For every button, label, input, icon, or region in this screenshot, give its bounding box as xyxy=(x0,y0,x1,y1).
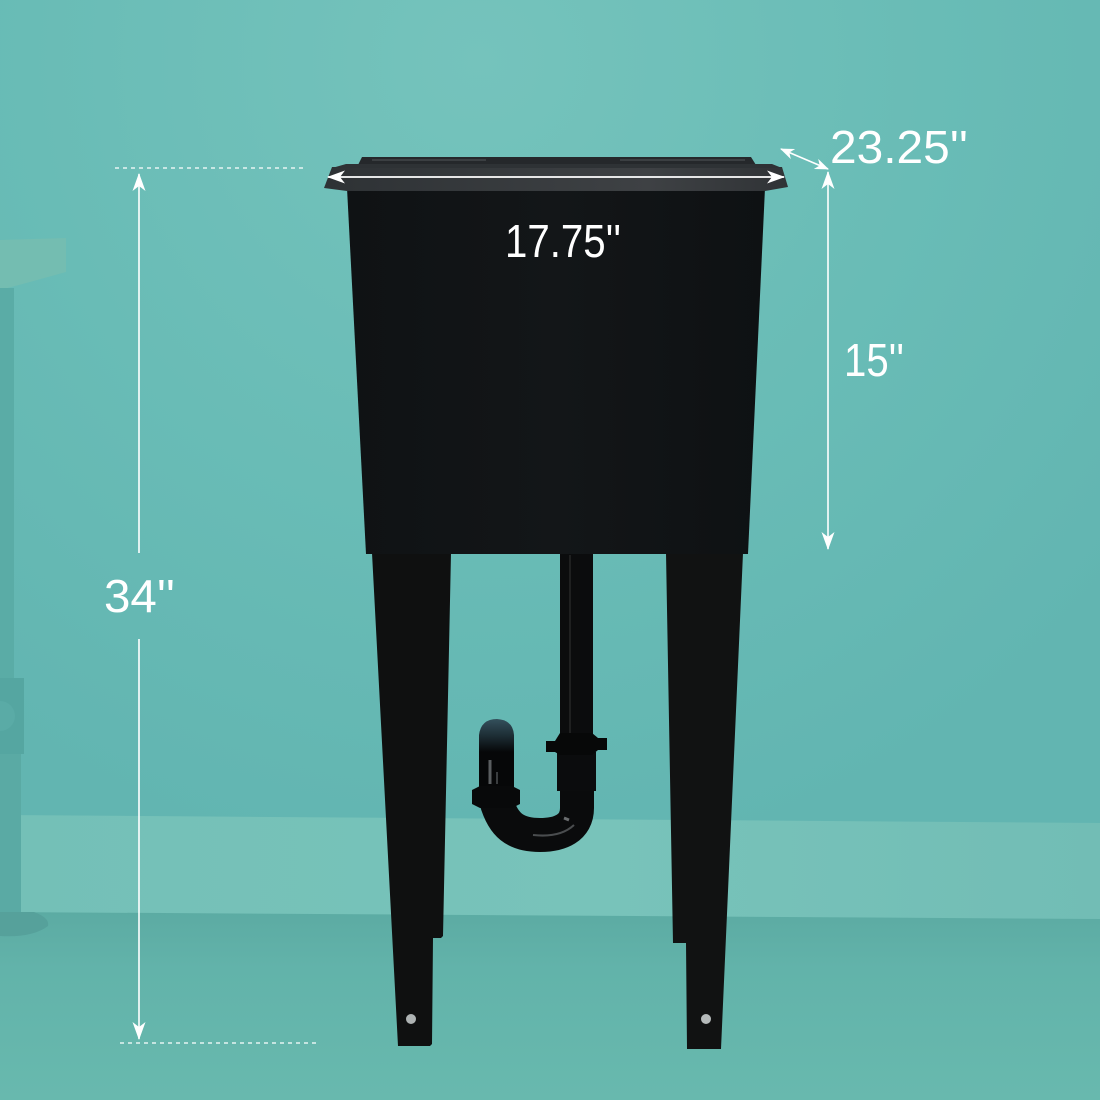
label: 15 inches: 15'' xyxy=(844,334,904,386)
background: baseboard xyxy=(0,815,1100,920)
label: 34 inches: 34'' xyxy=(104,570,175,622)
label: 17.75 inches: 17.75'' xyxy=(505,215,621,267)
tub rim xyxy=(324,157,788,191)
label: 23.25 inches: 23.25'' xyxy=(830,121,968,173)
utility sink xyxy=(324,157,788,1049)
drain P-trap pipe xyxy=(472,553,607,836)
faded table at left edge xyxy=(0,238,66,936)
dimension: tub depth xyxy=(781,121,968,173)
sink legs xyxy=(372,553,743,1049)
background: teal wall xyxy=(0,0,1100,830)
background: floor xyxy=(0,912,1100,1100)
tub body xyxy=(347,188,765,554)
